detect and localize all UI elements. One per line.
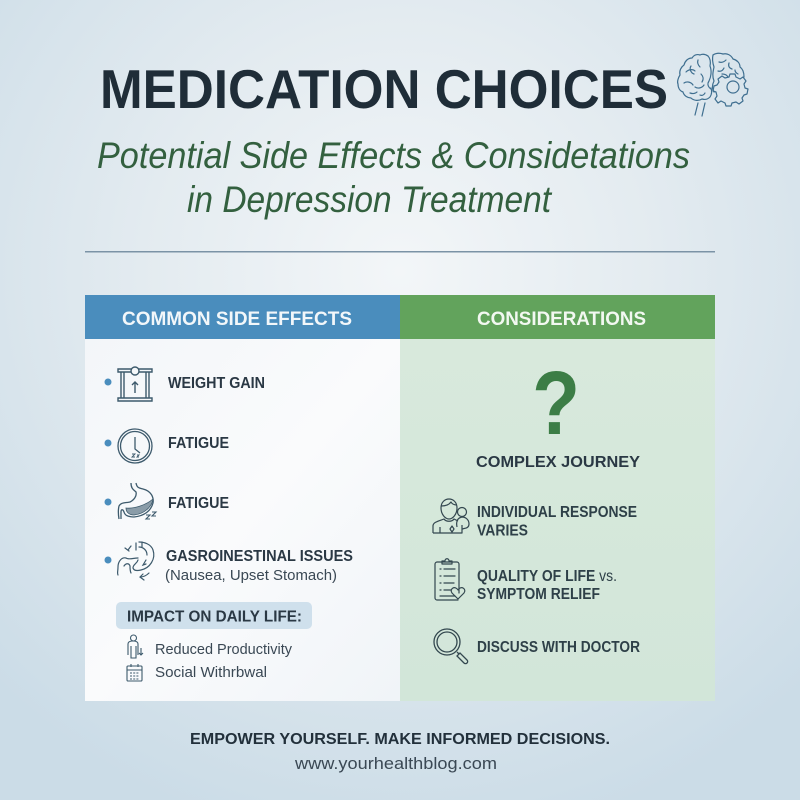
footer tagline: EMPOWER YOURSELF. MAKE INFORMED DECISIONS. — [190, 731, 610, 748]
item: weight gain: WEIGHT GAIN — [168, 375, 265, 392]
item: individual response — [433, 499, 637, 540]
item: individual response: VARIES — [477, 522, 528, 540]
item: reduced productivity — [128, 635, 292, 658]
item: fatigue stomach: FATIGUE — [168, 495, 229, 512]
item: fatigue clock — [104, 429, 229, 463]
item: weight gain — [104, 367, 265, 401]
footer url: www.yourhealthblog.com — [294, 754, 497, 773]
item: discuss with doctor — [434, 629, 640, 664]
item: quality of life: QUALITY OF LIFE vs. — [477, 568, 617, 585]
subtitle — [97, 135, 690, 220]
item: gastrointestinal issues: GASROINESTINAL ISSUES — [166, 548, 353, 565]
heading: complex journey: COMPLEX JOURNEY — [476, 454, 640, 471]
title: MEDICATION CHOICES — [100, 59, 668, 120]
callout: impact on daily life — [116, 602, 312, 629]
panel header: common side effects — [85, 295, 400, 339]
subtitle: in Depression Treatment — [187, 179, 553, 220]
item: social withdrawal: Social Withrbwal — [155, 664, 267, 681]
panel header: considerations — [400, 295, 715, 339]
panel: common side effects — [85, 295, 400, 701]
callout: impact on daily life: IMPACT ON DAILY LIFE: — [127, 608, 302, 626]
item: individual response: INDIVIDUAL RESPONSE — [477, 504, 637, 521]
item: fatigue clock: FATIGUE — [168, 435, 229, 452]
icon: brain with gear — [678, 53, 748, 116]
item: quality of life — [435, 559, 617, 603]
item: discuss with doctor: DISCUSS WITH DOCTOR — [477, 639, 640, 656]
item: gastrointestinal issues — [104, 542, 353, 584]
item: gastrointestinal issues: (Nausea, Upset Stomach) — [165, 567, 337, 584]
icon: question mark: ? — [532, 353, 580, 453]
divider — [85, 251, 715, 252]
item: quality of life: SYMPTOM RELIEF — [477, 586, 600, 603]
item: fatigue stomach — [104, 483, 229, 519]
panel header: common side effects: COMMON SIDE EFFECTS — [122, 308, 352, 330]
panel: considerations — [400, 295, 715, 701]
subtitle: Potential Side Effects & Considetations — [97, 135, 690, 176]
item: reduced productivity: Reduced Productivity — [155, 641, 292, 658]
panel header: considerations: CONSIDERATIONS — [477, 308, 646, 330]
